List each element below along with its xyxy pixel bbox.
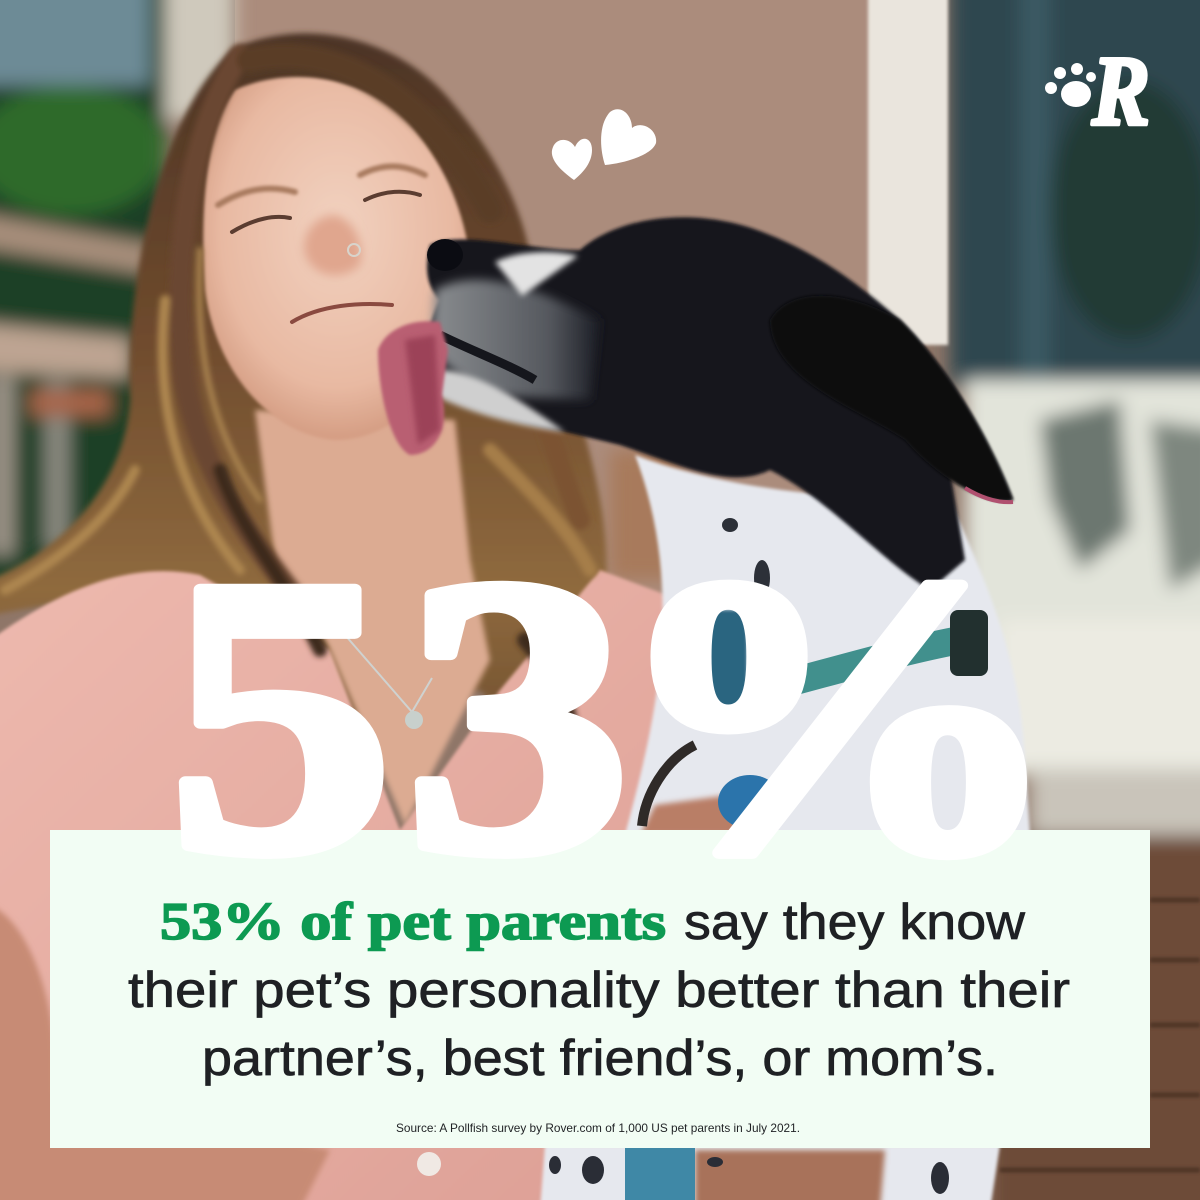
hand on dog bbox=[640, 795, 760, 835]
ear bbox=[770, 296, 1013, 501]
brows and eyes bbox=[232, 192, 420, 232]
nose bbox=[427, 239, 463, 271]
chin bbox=[425, 370, 565, 432]
face bbox=[203, 77, 471, 440]
dog bbox=[378, 217, 1030, 1200]
arm bbox=[0, 905, 330, 1200]
letter R: R bbox=[1091, 35, 1150, 146]
big number: 53%: 5 bbox=[168, 496, 393, 935]
tongue highlight bbox=[405, 335, 440, 445]
text: source: Source: A Pollfish survey by Rover.com of 1,000 US pet parents in July 2021. bbox=[396, 1121, 800, 1135]
harness bbox=[642, 745, 695, 826]
woman: hair, shirt, face bbox=[0, 33, 680, 1200]
muzzle bbox=[430, 280, 600, 400]
lower legs bbox=[540, 1145, 1000, 1200]
leash bbox=[625, 1145, 695, 1200]
head bbox=[427, 217, 1013, 590]
mouth line bbox=[440, 335, 535, 380]
leg spots bbox=[549, 1156, 949, 1194]
nose ring bbox=[348, 244, 360, 256]
mouth bbox=[292, 304, 392, 322]
paw bbox=[1045, 63, 1096, 107]
muzzle white blaze bbox=[495, 252, 578, 296]
collar bbox=[700, 640, 960, 705]
spots bbox=[754, 560, 770, 596]
neck and chest bbox=[255, 410, 490, 825]
big number: 53%: 3 bbox=[405, 496, 630, 935]
text: highlighted statement: 53% of pet parents bbox=[160, 893, 666, 951]
hair back bbox=[0, 33, 632, 775]
nose bbox=[304, 215, 361, 275]
ear tip pink bbox=[965, 488, 1013, 502]
shirt button bbox=[417, 1152, 441, 1176]
big number: 53%: % bbox=[611, 496, 1062, 935]
shirt bbox=[0, 570, 680, 1200]
necklace bbox=[345, 635, 432, 712]
tag bbox=[718, 775, 782, 829]
icon: hearts bbox=[552, 109, 656, 180]
text: line one: say they know bbox=[684, 894, 1026, 950]
tongue bbox=[378, 321, 448, 455]
panel: statement bbox=[50, 830, 1150, 1148]
text: line two: their pet’s personality better than their bbox=[128, 962, 1070, 1018]
hand below panel bbox=[695, 1150, 885, 1200]
icon: Rover logo bbox=[1045, 35, 1150, 146]
text: line three: partner’s, best friend’s, or mom’s. bbox=[202, 1030, 998, 1086]
body bbox=[625, 455, 1030, 835]
hair front streaks bbox=[5, 55, 590, 760]
